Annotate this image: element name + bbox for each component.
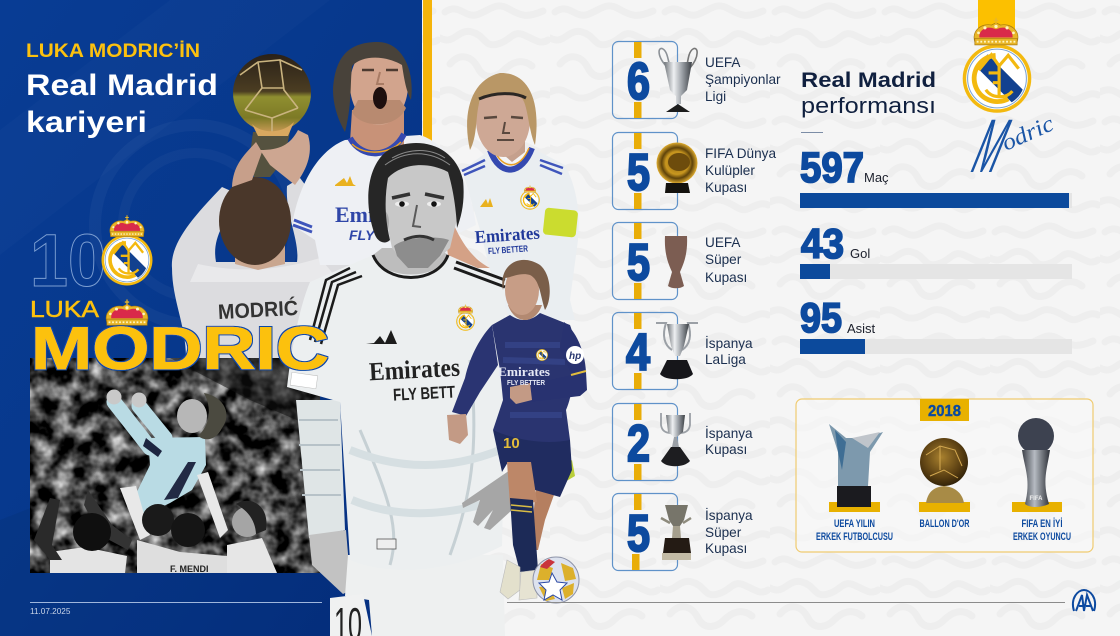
title: LUKA MODRIC’İN — [26, 39, 200, 62]
lower teammates: F. MENDI — [170, 564, 209, 574]
hand on hip — [462, 470, 512, 530]
stat: assists: 95 — [800, 294, 842, 341]
central black and white player — [287, 143, 512, 636]
Real Madrid crest — [963, 18, 1031, 113]
kit text: Emirates — [498, 365, 550, 379]
trophy row: Champions League: 6 — [627, 53, 650, 111]
trophy row: Club World Cup: 5 — [627, 144, 650, 202]
captain player: FLY BETTER — [488, 243, 529, 256]
football — [533, 557, 579, 603]
award: FIFA — [1012, 418, 1071, 543]
footer line — [507, 602, 1065, 603]
black and white celebration photo — [30, 358, 320, 574]
central black and white player: Emirates — [368, 353, 461, 386]
name block: Luka: LUKA — [30, 296, 100, 322]
shouting player — [292, 42, 490, 268]
central black and white player: FLY BETT — [393, 382, 456, 405]
label: Süper — [705, 525, 742, 540]
shouting player: FLY — [349, 227, 376, 243]
trophy row: LaLiga: 4 — [626, 324, 650, 382]
rear leg — [530, 488, 555, 550]
captain armband — [543, 207, 578, 238]
lifted player — [106, 390, 226, 520]
label: UEFA — [705, 55, 741, 70]
blue panel — [0, 0, 422, 636]
award: Ballon d'Or: BALLON D'OR — [920, 518, 970, 530]
trophy row: UEFA Super Cup — [612, 222, 747, 300]
front leg — [507, 462, 537, 505]
label: Süper — [705, 252, 742, 267]
trophy row: LaLiga — [612, 312, 753, 390]
gold ribbon — [978, 0, 1015, 30]
captain player — [462, 73, 579, 320]
label: Kupası — [705, 541, 747, 556]
award: FIFA: FIFA EN İYİ — [1022, 517, 1062, 530]
torso — [492, 313, 575, 442]
label: Kupası — [705, 180, 747, 195]
2018 awards panel — [796, 399, 1093, 552]
Modric signature: M — [961, 103, 1022, 188]
label: Ligi — [705, 89, 726, 104]
trophy row: Spanish Cup: 2 — [627, 415, 650, 473]
title — [26, 39, 218, 139]
lower teammates — [34, 472, 277, 574]
award: UEFA: ERKEK FUTBOLCUSU — [816, 531, 893, 543]
stat: matches: 597 — [800, 144, 864, 192]
trophy row: Club World Cup — [612, 132, 776, 210]
stat: goals: 43 — [801, 220, 844, 267]
label: Şampiyonlar — [705, 72, 781, 87]
trophy icon — [665, 236, 687, 288]
label: İspanya — [705, 336, 753, 351]
torso — [287, 255, 505, 570]
shorts — [493, 430, 572, 497]
label: İspanya — [705, 426, 753, 441]
AA logo — [1073, 590, 1095, 611]
year tag — [920, 399, 969, 421]
navy kit player with ball: FLY BETTER — [507, 380, 545, 387]
label: LaLiga — [705, 352, 746, 367]
hands — [232, 142, 262, 187]
award: UEFA: UEFA YILIN — [834, 518, 875, 530]
sleeve — [296, 400, 345, 538]
footer date: 11.07.2025 — [30, 607, 71, 616]
trophy row: Spanish Super Cup: 5 — [627, 505, 650, 563]
sleeve badge — [290, 372, 318, 389]
trophy row: Champions League — [612, 42, 781, 118]
trophy icon — [661, 413, 690, 466]
sleeves — [452, 325, 498, 416]
trophy icon — [656, 142, 698, 193]
shoes — [500, 560, 520, 599]
trophy icon — [661, 505, 691, 560]
trophy row: UEFA Super Cup: 5 — [627, 234, 650, 292]
performance heading: performansı — [801, 93, 936, 118]
stat: assists — [800, 294, 1072, 354]
stat: matches — [800, 144, 1072, 208]
outlined number 10 with crest — [30, 215, 152, 302]
award: UEFA — [816, 424, 893, 543]
label: Kulüpler — [705, 163, 755, 178]
trophy row: Spanish Super Cup — [612, 494, 753, 570]
head — [385, 163, 458, 268]
Modric signature: odric — [998, 111, 1057, 156]
award: Ballon d'Or — [919, 438, 970, 530]
captain player: Emirates — [474, 223, 540, 247]
label: Kupası — [705, 442, 747, 457]
shouting player: Emi — [335, 202, 374, 227]
head — [508, 305, 542, 320]
shorts — [345, 555, 505, 636]
label: FIFA Dünya — [705, 146, 776, 161]
stat: matches: Maç — [864, 170, 889, 185]
hands — [447, 414, 468, 444]
performance heading: Real Madrid — [801, 69, 936, 92]
jersey marks — [366, 330, 397, 344]
hand — [309, 530, 351, 594]
player with Ballon d'Or, from behind — [172, 54, 356, 358]
trophy icon — [659, 48, 697, 112]
gold vertical strip — [423, 0, 432, 636]
award: FIFA: FIFA — [1030, 496, 1043, 502]
MODRIC large name: MODRIC — [31, 315, 329, 382]
name block: Luka — [30, 296, 148, 325]
year tag: 2018 — [928, 403, 961, 420]
jersey name: MODRIĆ — [217, 296, 299, 324]
title: Real Madrid — [26, 69, 218, 102]
stat: goals — [800, 220, 1072, 279]
label: İspanya — [705, 508, 753, 523]
performance heading — [801, 69, 936, 133]
navy kit player with ball: hp — [569, 351, 581, 362]
trophy row: Spanish Cup — [612, 404, 753, 480]
title: kariyeri — [26, 106, 147, 139]
label: UEFA — [705, 235, 741, 250]
navy kit player with ball — [447, 260, 587, 603]
outlined number 10 with crest: 10 — [30, 219, 106, 302]
award: FIFA: ERKEK OYUNCU — [1013, 531, 1071, 543]
trophy icon — [656, 323, 698, 379]
Ballon d'Or trophy — [233, 54, 311, 177]
navy kit player with ball: 10 — [503, 435, 520, 452]
stat: goals: Gol — [850, 246, 870, 261]
stat: assists: Asist — [847, 321, 876, 336]
label: Kupası — [705, 270, 747, 285]
